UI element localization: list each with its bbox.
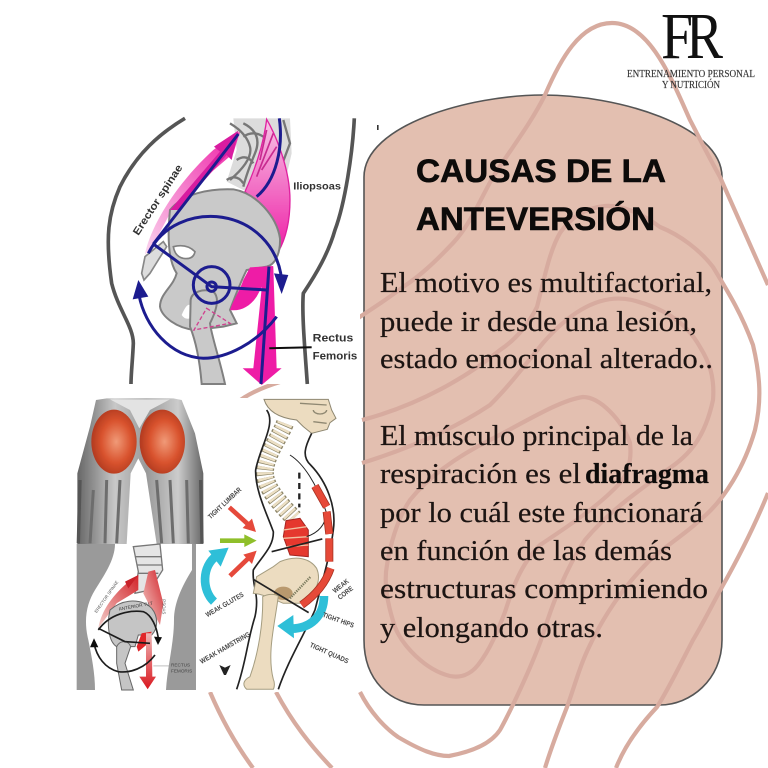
small pelvis diagram: ERECTOR SPINAE — [93, 580, 119, 614]
tagline — [627, 69, 755, 91]
spine vertebrae — [227, 118, 292, 190]
text block: diafragma: y elongando otras. — [380, 613, 603, 644]
tilt lines — [253, 539, 322, 613]
condition labels: TIGHT QUADS — [308, 642, 350, 666]
text block: diafragma: diafragma — [585, 459, 709, 490]
image: anterior tilt diagram with labelled muscles: Femoris — [313, 351, 357, 363]
text block: motivo multifactorial: El motivo es multifactorial, — [380, 268, 712, 299]
image: anterior tilt diagram with labelled muscles — [77, 118, 360, 385]
stray mark beside card — [377, 125, 379, 130]
red and green arrows — [229, 507, 250, 526]
pink down arrow — [243, 267, 282, 385]
text block: motivo multifactorial: estado emocional alterado.. — [380, 344, 713, 375]
monogram — [661, 0, 723, 73]
pelvis openings — [173, 246, 195, 259]
image: anterior tilt diagram with labelled muscles: Iliopsoas — [293, 181, 341, 192]
text block: motivo multifactorial: puede ir desde una lesión, — [380, 307, 697, 338]
iliopsoas muscle — [245, 119, 290, 252]
heading: ANTEVERSIÓN — [416, 201, 655, 237]
heading — [416, 153, 666, 237]
small brand mark — [219, 665, 231, 675]
text block: diafragma: El músculo principal de la — [380, 421, 693, 452]
rectus femoris muscle — [230, 266, 273, 310]
heading: CAUSAS DE LA — [416, 153, 666, 189]
panel: text card — [364, 95, 722, 705]
femur — [190, 290, 225, 384]
decorative organic curves — [210, 23, 768, 768]
dashed pink triangle — [194, 308, 230, 330]
image: anterior tilt diagram with labelled muscles: Rectus — [313, 333, 353, 345]
small pelvis diagram: RECTUS — [171, 662, 190, 667]
glutes illustration — [77, 398, 203, 544]
condition labels: WEAK — [332, 578, 351, 595]
text block: diafragma: respiración es el — [380, 459, 581, 490]
text block: diafragma — [380, 421, 709, 644]
pelvis — [160, 189, 280, 330]
pelvis and femur — [253, 558, 318, 603]
tagline: ENTRENAMIENTO PERSONAL — [627, 69, 755, 80]
monogram: F — [661, 0, 693, 73]
spine — [265, 423, 294, 518]
small pelvis diagram — [77, 544, 196, 690]
condition labels: WEAK HAMSTRING — [199, 631, 252, 666]
small pelvis diagram: FEMORIS — [171, 668, 192, 673]
small pelvis diagram: PSOAS — [161, 599, 166, 614]
leader line — [269, 344, 312, 351]
condition labels: TIGHT HIPS — [322, 612, 355, 630]
text block: diafragma: estructuras comprimiendo — [380, 574, 708, 605]
image group: glutes, small pelvis, skeleton — [77, 398, 360, 692]
erector spinae muscle — [145, 132, 240, 255]
body outline — [237, 410, 334, 689]
condition labels: TIGHT LUMBAR — [207, 487, 243, 521]
abdominal segments — [302, 486, 331, 605]
lumbar vertebrae in red — [283, 518, 308, 557]
blue rotation arrows — [139, 118, 282, 384]
sacrum — [142, 242, 167, 280]
text block: diafragma: en función de las demás — [380, 536, 672, 567]
body outline — [108, 118, 354, 384]
condition labels — [199, 487, 355, 666]
condition labels: CORE — [337, 585, 355, 602]
logo: FR monogram and tagline — [627, 0, 755, 91]
skeleton posture illustration — [199, 399, 355, 689]
text block: diafragma: por lo cuál este funcionará — [380, 498, 703, 529]
muscle labels: Erector spinae — [131, 163, 185, 238]
text block: motivo multifactorial — [380, 268, 713, 375]
monogram: R — [686, 0, 723, 73]
condition labels: WEAK GLUTES — [205, 592, 246, 619]
skull — [264, 399, 336, 433]
cyan arrows — [205, 556, 217, 602]
tagline: Y NUTRICIÓN — [662, 79, 720, 91]
small pelvis diagram: ANTERIOR TILT — [118, 601, 153, 612]
